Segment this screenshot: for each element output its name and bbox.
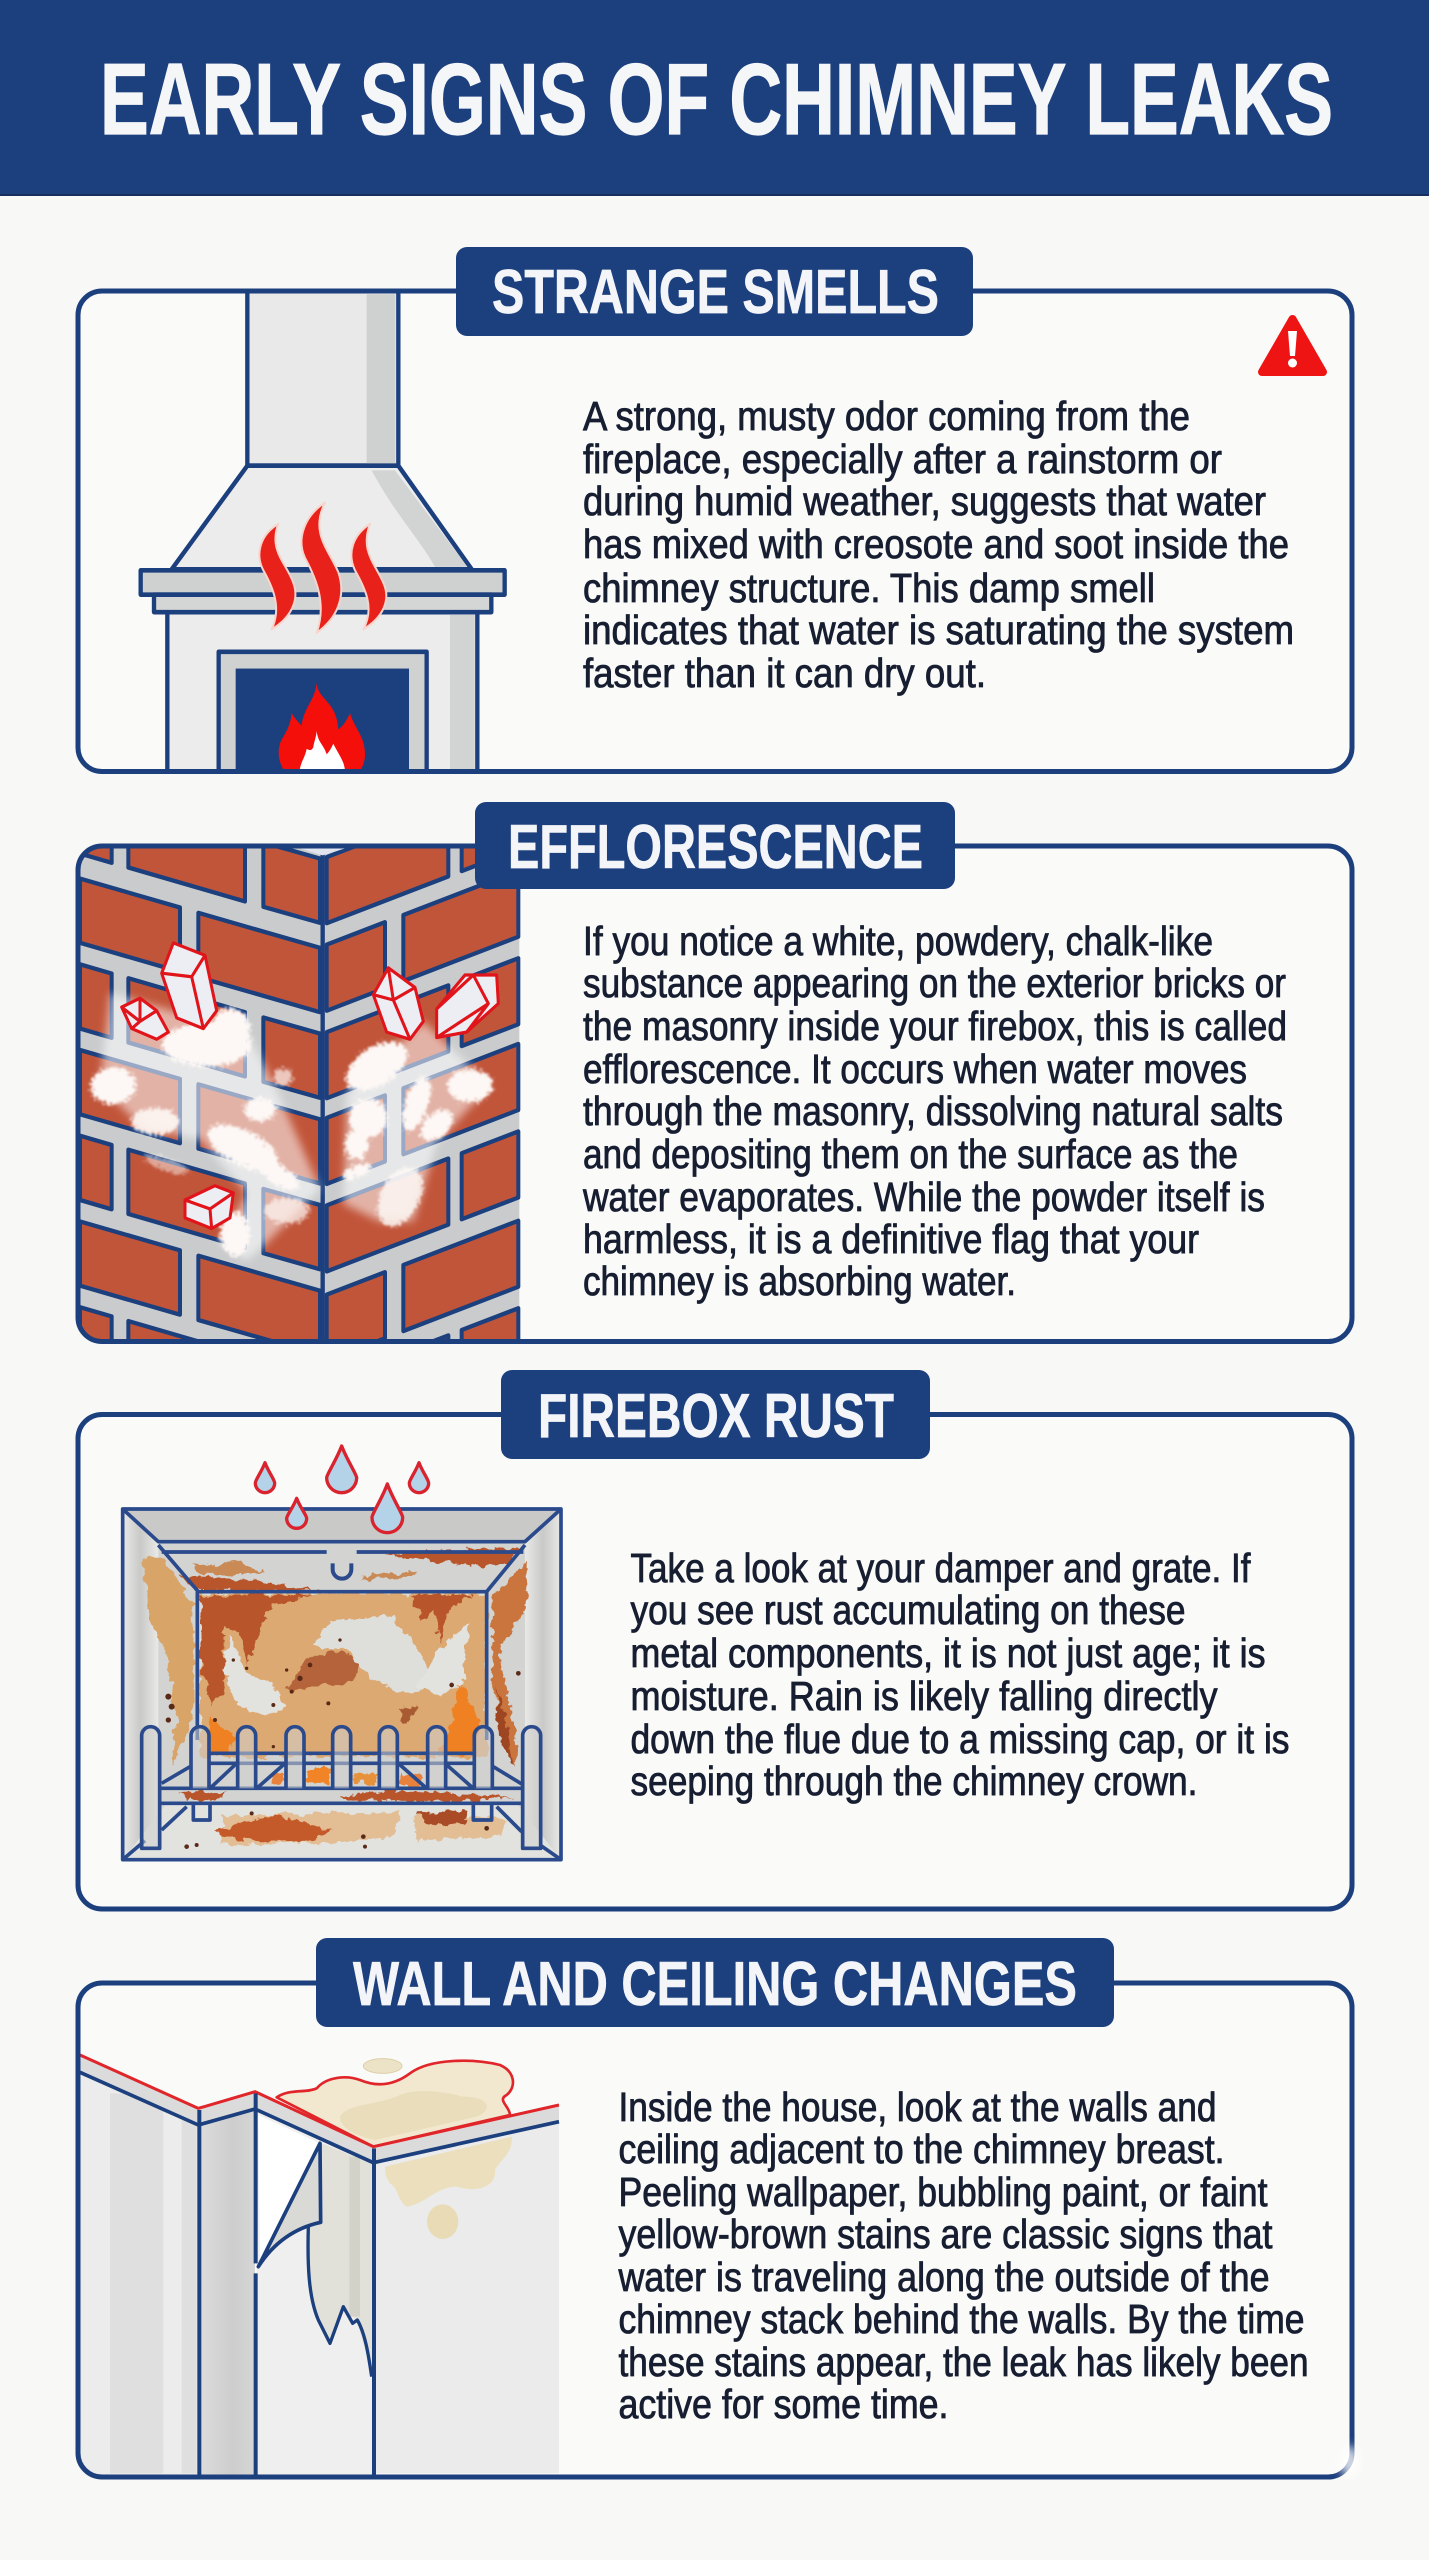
heading badge: STRANGE SMELLS <box>492 258 939 327</box>
text block: Take a look at your damper and grate. If <box>630 1545 1251 1591</box>
text block: water evaporates. While the powder itself is <box>582 1174 1265 1220</box>
panel: strange smells <box>78 247 1352 777</box>
text block: metal components, it is not just age; it is <box>630 1630 1266 1676</box>
text block: seeping through the chimney crown. <box>630 1758 1198 1804</box>
illustration: stained wall and peeling wallpaper <box>80 2055 559 2478</box>
grate <box>160 1753 523 1832</box>
text block: faster than it can dry out. <box>583 650 986 696</box>
water drops <box>255 1446 429 1533</box>
text block: chimney structure. This damp smell <box>583 565 1155 611</box>
efflorescence powder <box>91 1008 493 1256</box>
heading badge <box>456 247 973 336</box>
text block: through the masonry, dissolving natural salts <box>583 1088 1283 1134</box>
illustration: brick corner with salt crystals <box>80 848 520 1339</box>
wall stain <box>385 2137 512 2207</box>
illustration: rusted firebox with water drops <box>123 1446 561 1860</box>
text block: A strong, musty odor coming from the <box>583 393 1190 439</box>
text block: water is traveling along the outside of the <box>618 2254 1270 2300</box>
illustration: fireplace with rising smell <box>141 288 505 777</box>
text block: moisture. Rain is likely falling directly <box>630 1673 1218 1719</box>
text block: has mixed with creosote and soot inside the <box>583 521 1289 567</box>
text block: active for some time. <box>618 2381 948 2427</box>
heading badge: EFFLORESCENCE <box>508 813 923 882</box>
peeling wallpaper <box>258 2143 321 2267</box>
text block <box>618 2084 1308 2427</box>
ceiling stain <box>277 2061 513 2147</box>
text block: chimney is absorbing water. <box>583 1258 1016 1304</box>
heading badge: WALL AND CEILING CHANGES <box>353 1950 1077 2019</box>
text block: If you notice a white, powdery, chalk-like <box>583 918 1213 964</box>
text block: and depositing them on the surface as the <box>583 1131 1238 1177</box>
panel: wall and ceiling changes <box>78 1938 1360 2478</box>
efflorescence haze <box>100 993 490 1261</box>
panel border <box>78 291 1352 772</box>
text block: harmless, it is a definitive flag that your <box>583 1216 1199 1262</box>
panel border <box>78 1983 1352 2477</box>
text block: Peeling wallpaper, bubbling paint, or faint <box>618 2169 1268 2215</box>
text block: ceiling adjacent to the chimney breast. <box>618 2126 1224 2172</box>
text block <box>583 393 1294 696</box>
text block: down the flue due to a missing cap, or it is <box>630 1716 1290 1762</box>
heading badge: FIREBOX RUST <box>538 1382 894 1451</box>
title banner <box>0 0 1429 196</box>
text block: chimney stack behind the walls. By the time <box>618 2296 1304 2342</box>
panel border <box>78 846 1352 1342</box>
panel: firebox rust <box>78 1370 1352 1909</box>
heading badge <box>501 1370 930 1459</box>
text block: fireplace, especially after a rainstorm or <box>583 436 1222 482</box>
text block: substance appearing on the exterior bricks or <box>583 960 1286 1006</box>
crown molding <box>80 2055 559 2163</box>
rust patches <box>143 1548 527 1845</box>
text block: yellow-brown stains are classic signs that <box>618 2211 1273 2257</box>
heading badge <box>316 1938 1114 2027</box>
text block <box>582 918 1287 1304</box>
text block: Inside the house, look at the walls and <box>618 2084 1216 2130</box>
text block: during humid weather, suggests that water <box>583 478 1266 524</box>
icon: warning triangle <box>1262 319 1323 372</box>
text block: efflorescence. It occurs when water moves <box>583 1046 1247 1092</box>
text block: you see rust accumulating on these <box>630 1587 1186 1633</box>
panel: efflorescence <box>76 783 1352 1448</box>
text block: indicates that water is saturating the system <box>583 607 1294 653</box>
heading badge <box>475 802 955 889</box>
text block: these stains appear, the leak has likely been <box>618 2339 1308 2385</box>
firebox outline <box>123 1509 561 1860</box>
text block: the masonry inside your firebox, this is called <box>583 1003 1287 1049</box>
text block <box>630 1545 1290 1804</box>
crystals <box>122 943 498 1229</box>
